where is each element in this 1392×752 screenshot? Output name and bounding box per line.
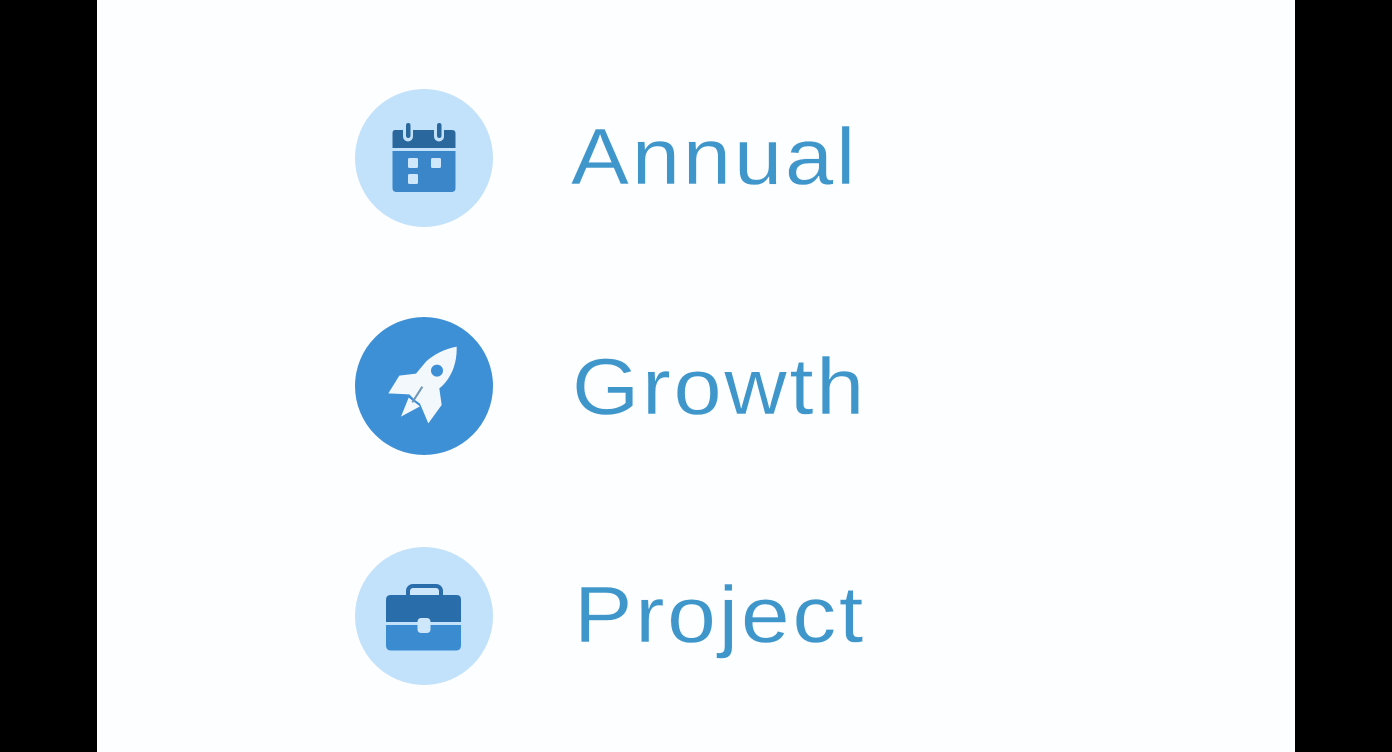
- label: Project: Project: [574, 570, 866, 659]
- row: Growth: [355, 317, 867, 455]
- icon: calendar: [355, 89, 493, 227]
- row: Project: [355, 547, 866, 685]
- icon: briefcase: [355, 547, 493, 685]
- label: Annual: Annual: [571, 112, 858, 201]
- label: Growth: Growth: [572, 342, 867, 431]
- icon: rocket: [355, 317, 493, 455]
- row: Annual: [355, 89, 858, 227]
